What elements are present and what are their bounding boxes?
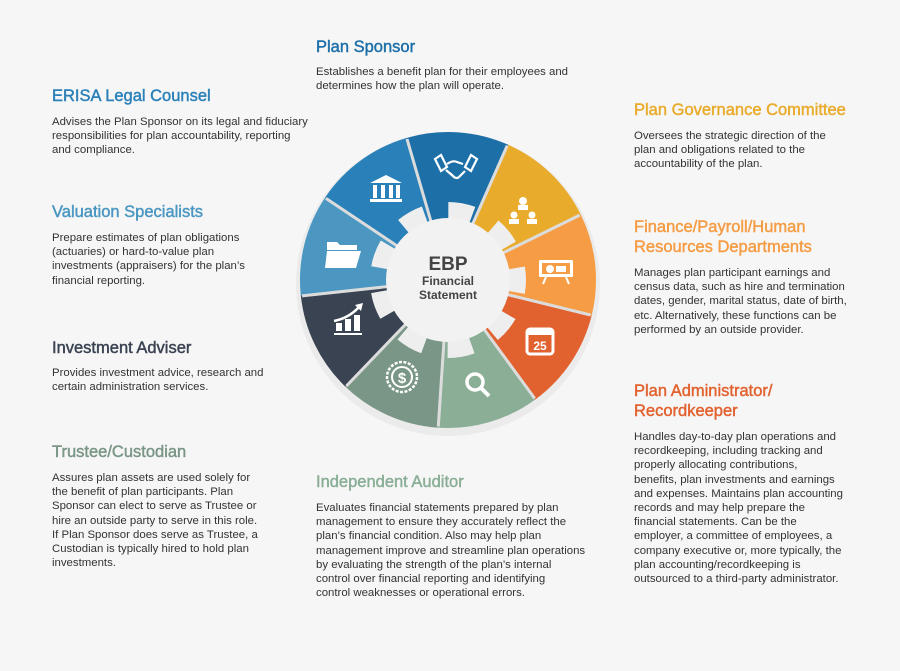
heading: Trustee/Custodian: Trustee/Custodian [52, 443, 186, 461]
text: Finance: census data, such as hire and termination [634, 281, 845, 293]
text: Plan Administrator: plan accounting/recordkeeping is [634, 559, 801, 571]
text: Plan Administrator [634, 431, 843, 585]
icon: presentation [539, 260, 573, 284]
text: Valuation: investments (appraisers) for the plan’s [52, 260, 245, 272]
center label: Statement [419, 288, 477, 302]
text: Plan Administrator: benefits, plan investments and earnings [634, 474, 835, 486]
text: Plan Administrator: properly allocating contributions, [634, 459, 797, 471]
text: Plan Sponsor: determines how the plan will operate. [316, 80, 504, 92]
text: Trustee [52, 472, 258, 569]
center label: EBP [428, 254, 468, 275]
heading: Finance [634, 218, 812, 256]
text: Auditor: control weaknesses or operational errors. [316, 587, 525, 599]
text: ERISA: and compliance. [52, 144, 135, 156]
icon: calendar [527, 329, 553, 354]
text: Governance: Oversees the strategic direction of the [634, 130, 826, 142]
icons [325, 155, 573, 396]
heading: Valuation Specialists: Valuation Specialists [52, 203, 203, 221]
text: Finance: Manages plan participant earnings and [634, 267, 830, 279]
icon: growth chart [334, 303, 363, 335]
heading: ERISA Legal Counsel: ERISA Legal Counsel [52, 87, 211, 105]
heading: Independent Auditor: Independent Auditor [316, 473, 464, 491]
text: Plan Administrator: outsourced to a third-party administrator. [634, 573, 838, 585]
heading: Plan Administrator [634, 382, 773, 420]
center label [419, 254, 477, 302]
text: Plan Administrator: recordkeeping, including tracking and [634, 445, 823, 457]
heading: Plan Administrator: Plan Administrator/ [634, 382, 772, 400]
text: ERISA: Advises the Plan Sponsor on its legal and fiduciary [52, 116, 308, 128]
text: Valuation: Prepare estimates of plan obligations [52, 232, 239, 244]
text: Governance: accountability of the plan. [634, 158, 763, 170]
text: Plan Administrator: and expenses. Maintains plan accounting [634, 488, 843, 500]
text: Governance: plan and obligations related to the [634, 144, 805, 156]
text: Auditor: Evaluates financial statements prepared by plan [316, 502, 559, 514]
text: Valuation [52, 232, 245, 287]
icon: calendar: 25 [533, 339, 547, 353]
text: Trustee: If Plan Sponsor does serve as Trustee, a [52, 529, 258, 541]
text: Trustee: investments. [52, 557, 116, 569]
text: Plan Administrator: records and may help prepare the [634, 502, 805, 514]
text: ERISA [52, 116, 308, 156]
heading: Finance: Finance/Payroll/Human [634, 218, 806, 236]
text: Trustee: Sponsor can elect to serve as Trustee or [52, 500, 257, 512]
text: Governance [634, 130, 826, 170]
text: Valuation: (actuaries) or hard-to-value plan [52, 246, 214, 258]
text: Valuation: financial reporting. [52, 275, 145, 287]
icon: bank [370, 175, 402, 202]
text: Investment Adviser: certain administration services. [52, 381, 208, 393]
text: Trustee: Assures plan assets are used solely for [52, 472, 250, 484]
text: Finance [634, 267, 847, 336]
icon: folder [325, 242, 361, 268]
heading: Plan Sponsor: Plan Sponsor [316, 38, 415, 56]
icon: org chart [509, 197, 537, 224]
heading: Investment Adviser: Investment Adviser [52, 339, 191, 357]
heading: Plan Governance Committee: Plan Governance Committee [634, 101, 846, 119]
text: Auditor: plan’s financial condition. Also may help plan [316, 530, 541, 542]
text: Plan Sponsor [316, 66, 568, 92]
text: Auditor: control over financial reporting and identifying [316, 573, 545, 585]
text: Finance: dates, gender, marital status, date of birth, [634, 295, 847, 307]
text: Trustee: hire an outside party to serve in this role. [52, 515, 257, 527]
text: Plan Administrator: financial statements. Can be the [634, 516, 797, 528]
icon: dollar coin: $ [398, 370, 407, 387]
text: Plan Administrator: employer, a committee of employees, a [634, 530, 832, 542]
text: Plan Sponsor: Establishes a benefit plan for their employees and [316, 66, 568, 78]
icon: dollar coin [387, 362, 417, 392]
text: Investment Adviser [52, 367, 263, 393]
center label: Financial [422, 274, 474, 288]
text: Auditor: by evaluating the strength of the plan’s internal [316, 559, 551, 571]
heading: Plan Administrator: Recordkeeper [634, 402, 738, 420]
text: Finance: etc. Alternatively, these functions can be [634, 310, 836, 322]
text: Auditor: management improve and streamline plan operations [316, 545, 585, 557]
text: Trustee: Custodian is typically hired to hold plan [52, 543, 249, 555]
text: ERISA: responsibilities for plan accountability, reporting [52, 130, 290, 142]
icon: handshake [435, 155, 477, 178]
text: Investment Adviser: Provides investment advice, research and [52, 367, 263, 379]
icon: magnifier [467, 374, 489, 396]
text: Trustee: the benefit of plan participants. Plan [52, 486, 233, 498]
text: Plan Administrator: Handles day-to-day plan operations and [634, 431, 836, 443]
heading: Finance: Resources Departments [634, 238, 812, 256]
text: Auditor: management to ensure they accurately reflect the [316, 516, 566, 528]
text: Finance: performed by an outside provider. [634, 324, 804, 336]
text: Auditor [316, 502, 585, 599]
text: Plan Administrator: company executive or, more typically, the [634, 545, 841, 557]
